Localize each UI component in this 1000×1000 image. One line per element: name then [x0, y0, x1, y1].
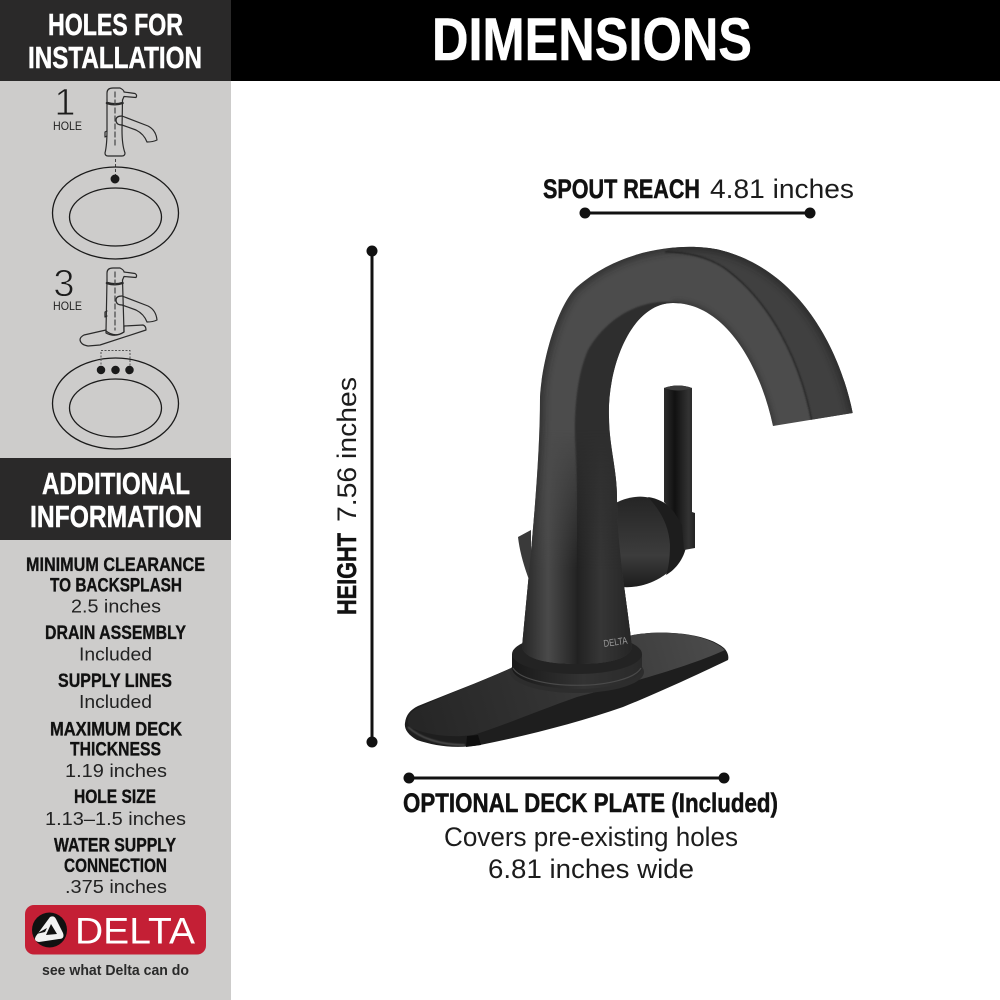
base ring	[510, 634, 644, 693]
label: 1 hole	[53, 82, 82, 133]
header bar: dimensions	[231, 0, 1000, 81]
dimension line: spout reach	[580, 208, 816, 218]
spec: minimum clearance	[26, 555, 205, 616]
icon: one-hole sink	[52, 167, 178, 259]
icon: three-hole sink	[52, 350, 178, 449]
heading: holes for installation: INSTALLATION	[28, 40, 202, 75]
faucet photo illustration	[405, 230, 880, 747]
label: height: 7.56 inches	[332, 377, 362, 522]
spec: supply lines: Included	[79, 692, 152, 712]
spec: hole size: 1.13–1.5 inches	[45, 809, 186, 829]
spec: maximum deck thickness: 1.19 inches	[65, 761, 167, 781]
label: 1 hole: HOLE	[53, 119, 82, 133]
spec: water supply connection	[54, 836, 176, 897]
spec: water supply connection: CONNECTION	[64, 856, 167, 877]
deck plate	[405, 633, 728, 747]
spec: minimum clearance: 2.5 inches	[71, 596, 161, 616]
spec: maximum deck thickness	[50, 720, 182, 781]
tagline: see what Delta can do	[42, 962, 189, 979]
spec: water supply connection: WATER SUPPLY	[54, 836, 176, 857]
header bar: additional information	[0, 458, 231, 540]
icon: connector line 1	[114, 159, 116, 175]
label: spout reach: SPOUT REACH	[543, 174, 700, 204]
icon: three-hole faucet with plate	[80, 268, 157, 346]
label: optional deck plate: 6.81 inches wide	[488, 854, 694, 884]
spec: drain assembly: Included	[79, 644, 152, 664]
handle cylinder	[612, 497, 685, 587]
handle cap	[648, 497, 687, 575]
spec: supply lines	[58, 671, 172, 712]
lift rod	[518, 530, 531, 585]
spec: minimum clearance: MINIMUM CLEARANCE	[26, 555, 205, 576]
spec: minimum clearance: TO BACKSPLASH	[50, 576, 182, 596]
label: height: HEIGHT	[332, 533, 362, 615]
panel: left sidebar	[0, 81, 231, 1000]
label: spout reach: 4.81 inches	[710, 174, 854, 204]
label: spout reach	[543, 174, 854, 204]
heading: holes for installation	[28, 7, 202, 75]
label: 1 hole: 1	[54, 82, 76, 124]
header bar: holes for installation	[0, 0, 231, 81]
lever	[664, 386, 695, 550]
spec: water supply connection: .375 inches	[65, 877, 167, 897]
spec: hole size	[45, 787, 186, 829]
icon: single-hole faucet	[105, 88, 157, 156]
label: optional deck plate: Covers pre-existing holes	[444, 822, 738, 852]
heading: holes for installation: HOLES FOR	[48, 7, 183, 42]
heading: additional information: ADDITIONAL	[42, 466, 190, 501]
label: 3 hole: HOLE	[53, 299, 82, 313]
spec: supply lines: SUPPLY LINES	[58, 671, 172, 692]
label: height	[332, 377, 362, 615]
spec: drain assembly: DRAIN ASSEMBLY	[45, 623, 186, 644]
heading: additional information	[30, 466, 202, 534]
spec: drain assembly	[45, 623, 186, 664]
label: 3 hole	[53, 263, 82, 313]
spec: hole size: HOLE SIZE	[74, 787, 156, 808]
label: optional deck plate	[403, 788, 778, 884]
logo: Delta: DELTA	[75, 910, 195, 952]
dimension line: height	[366, 246, 378, 748]
logo: Delta	[25, 905, 206, 954]
dimension line: deck plate	[404, 772, 730, 784]
spec: maximum deck thickness: MAXIMUM DECK	[50, 720, 182, 740]
spec: maximum deck thickness: THICKNESS	[70, 740, 161, 761]
brand mark on body: DELTA	[603, 636, 628, 650]
spout and body	[522, 246, 853, 664]
label: 3 hole: 3	[53, 263, 75, 305]
title: DIMENSIONS	[432, 6, 752, 73]
heading: additional information: INFORMATION	[30, 499, 202, 534]
label: optional deck plate: OPTIONAL DECK PLATE (Included)	[403, 788, 778, 818]
